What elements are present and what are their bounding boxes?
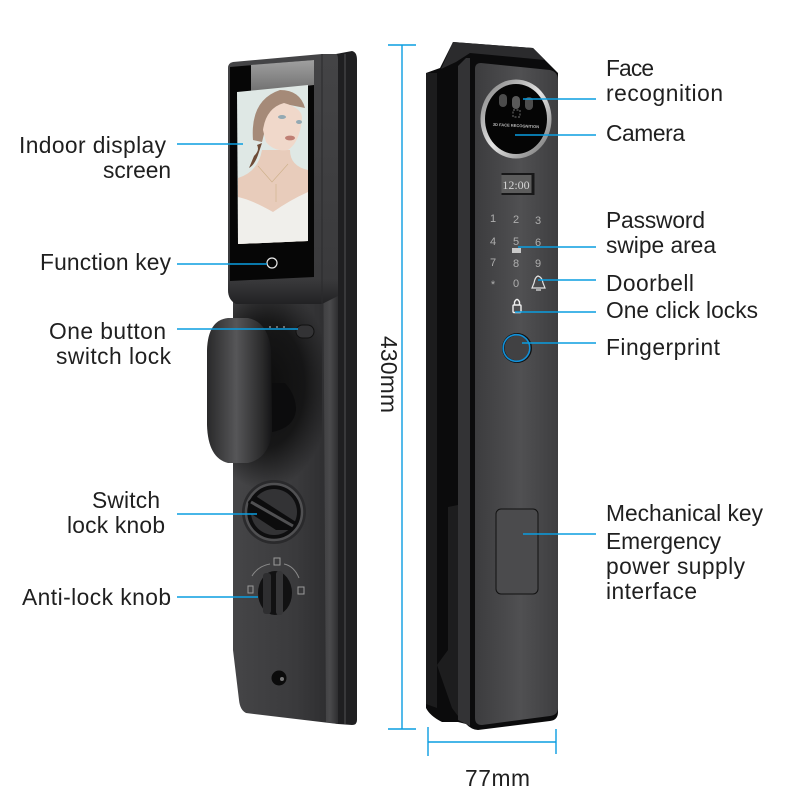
dimension: height bbox=[388, 45, 416, 729]
indicator dots bbox=[269, 326, 285, 328]
time display: 12:00 bbox=[502, 178, 530, 192]
indoor display glass bbox=[230, 60, 314, 281]
time display bbox=[502, 173, 534, 195]
keypad: 0 bbox=[513, 278, 519, 290]
label: emergency power supply interface: Emergency bbox=[606, 528, 722, 554]
display hood bbox=[228, 54, 338, 304]
label: one button switch lock: switch lock bbox=[56, 343, 172, 369]
lock icon bbox=[513, 300, 521, 312]
key hole bbox=[272, 670, 286, 686]
label: indoor display screen: Indoor display bbox=[19, 132, 167, 158]
label: face recognition: recognition bbox=[606, 80, 723, 106]
face icon bbox=[513, 110, 520, 117]
label: face recognition: Face bbox=[606, 55, 654, 81]
label: switch lock knob: lock knob bbox=[67, 512, 165, 538]
lever handle bbox=[207, 318, 272, 463]
keypad: 9 bbox=[535, 258, 541, 270]
keypad: 2 bbox=[513, 214, 519, 226]
left lock: indoor panel bbox=[199, 51, 357, 725]
label: anti-lock knob: Anti-lock knob bbox=[22, 584, 171, 610]
label: 77mm width: 77mm bbox=[465, 765, 530, 791]
label: camera: Camera bbox=[606, 120, 685, 146]
label: one click locks: One click locks bbox=[606, 297, 758, 323]
mechanical key cover bbox=[496, 509, 538, 594]
keypad: 5 bbox=[513, 236, 519, 248]
doorbell icon bbox=[532, 276, 545, 290]
right lock: outdoor panel bbox=[426, 42, 558, 730]
back section bbox=[426, 42, 558, 730]
keypad: * bbox=[491, 279, 496, 291]
label: emergency power supply interface: power supply bbox=[606, 553, 746, 579]
keypad: 1 bbox=[490, 213, 496, 225]
keypad bbox=[490, 213, 541, 291]
dimension: width bbox=[428, 727, 556, 756]
label: function key: Function key bbox=[40, 249, 172, 275]
label: password swipe area: Password bbox=[606, 207, 705, 233]
lever neck bbox=[272, 383, 296, 432]
label: one button switch lock: One button bbox=[49, 318, 166, 344]
label: emergency power supply interface: interface bbox=[606, 578, 697, 604]
label: password swipe area: swipe area bbox=[606, 232, 716, 258]
lock body bbox=[336, 51, 357, 725]
recognition caption: 3D FACE RECOGNITION bbox=[493, 122, 539, 129]
fingerprint sensor bbox=[502, 333, 532, 363]
soft shadow behind lever bbox=[233, 302, 322, 482]
label: mechanical key: Mechanical key bbox=[606, 500, 764, 526]
function key ring bbox=[267, 258, 277, 268]
label: doorbell: Doorbell bbox=[606, 270, 694, 296]
portrait photo on screen bbox=[236, 84, 310, 246]
label: fingerprint: Fingerprint bbox=[606, 334, 721, 360]
keypad: 3 bbox=[535, 215, 541, 227]
keypad: 8 bbox=[513, 258, 519, 270]
label: switch lock knob: Switch bbox=[92, 487, 160, 513]
keypad: 6 bbox=[535, 237, 541, 249]
front face bbox=[475, 63, 558, 725]
sensors bbox=[499, 94, 533, 110]
label: indoor display screen: screen bbox=[103, 157, 171, 183]
one button switch bbox=[296, 325, 314, 338]
switch lock knob bbox=[242, 480, 306, 544]
keypad: 7 bbox=[490, 257, 496, 269]
face recognition ring bbox=[480, 80, 552, 158]
callout lines bbox=[177, 99, 596, 597]
keypad: 4 bbox=[490, 236, 496, 248]
anti-lock knob bbox=[248, 558, 304, 615]
label: 430mm height: 430mm bbox=[376, 336, 402, 413]
